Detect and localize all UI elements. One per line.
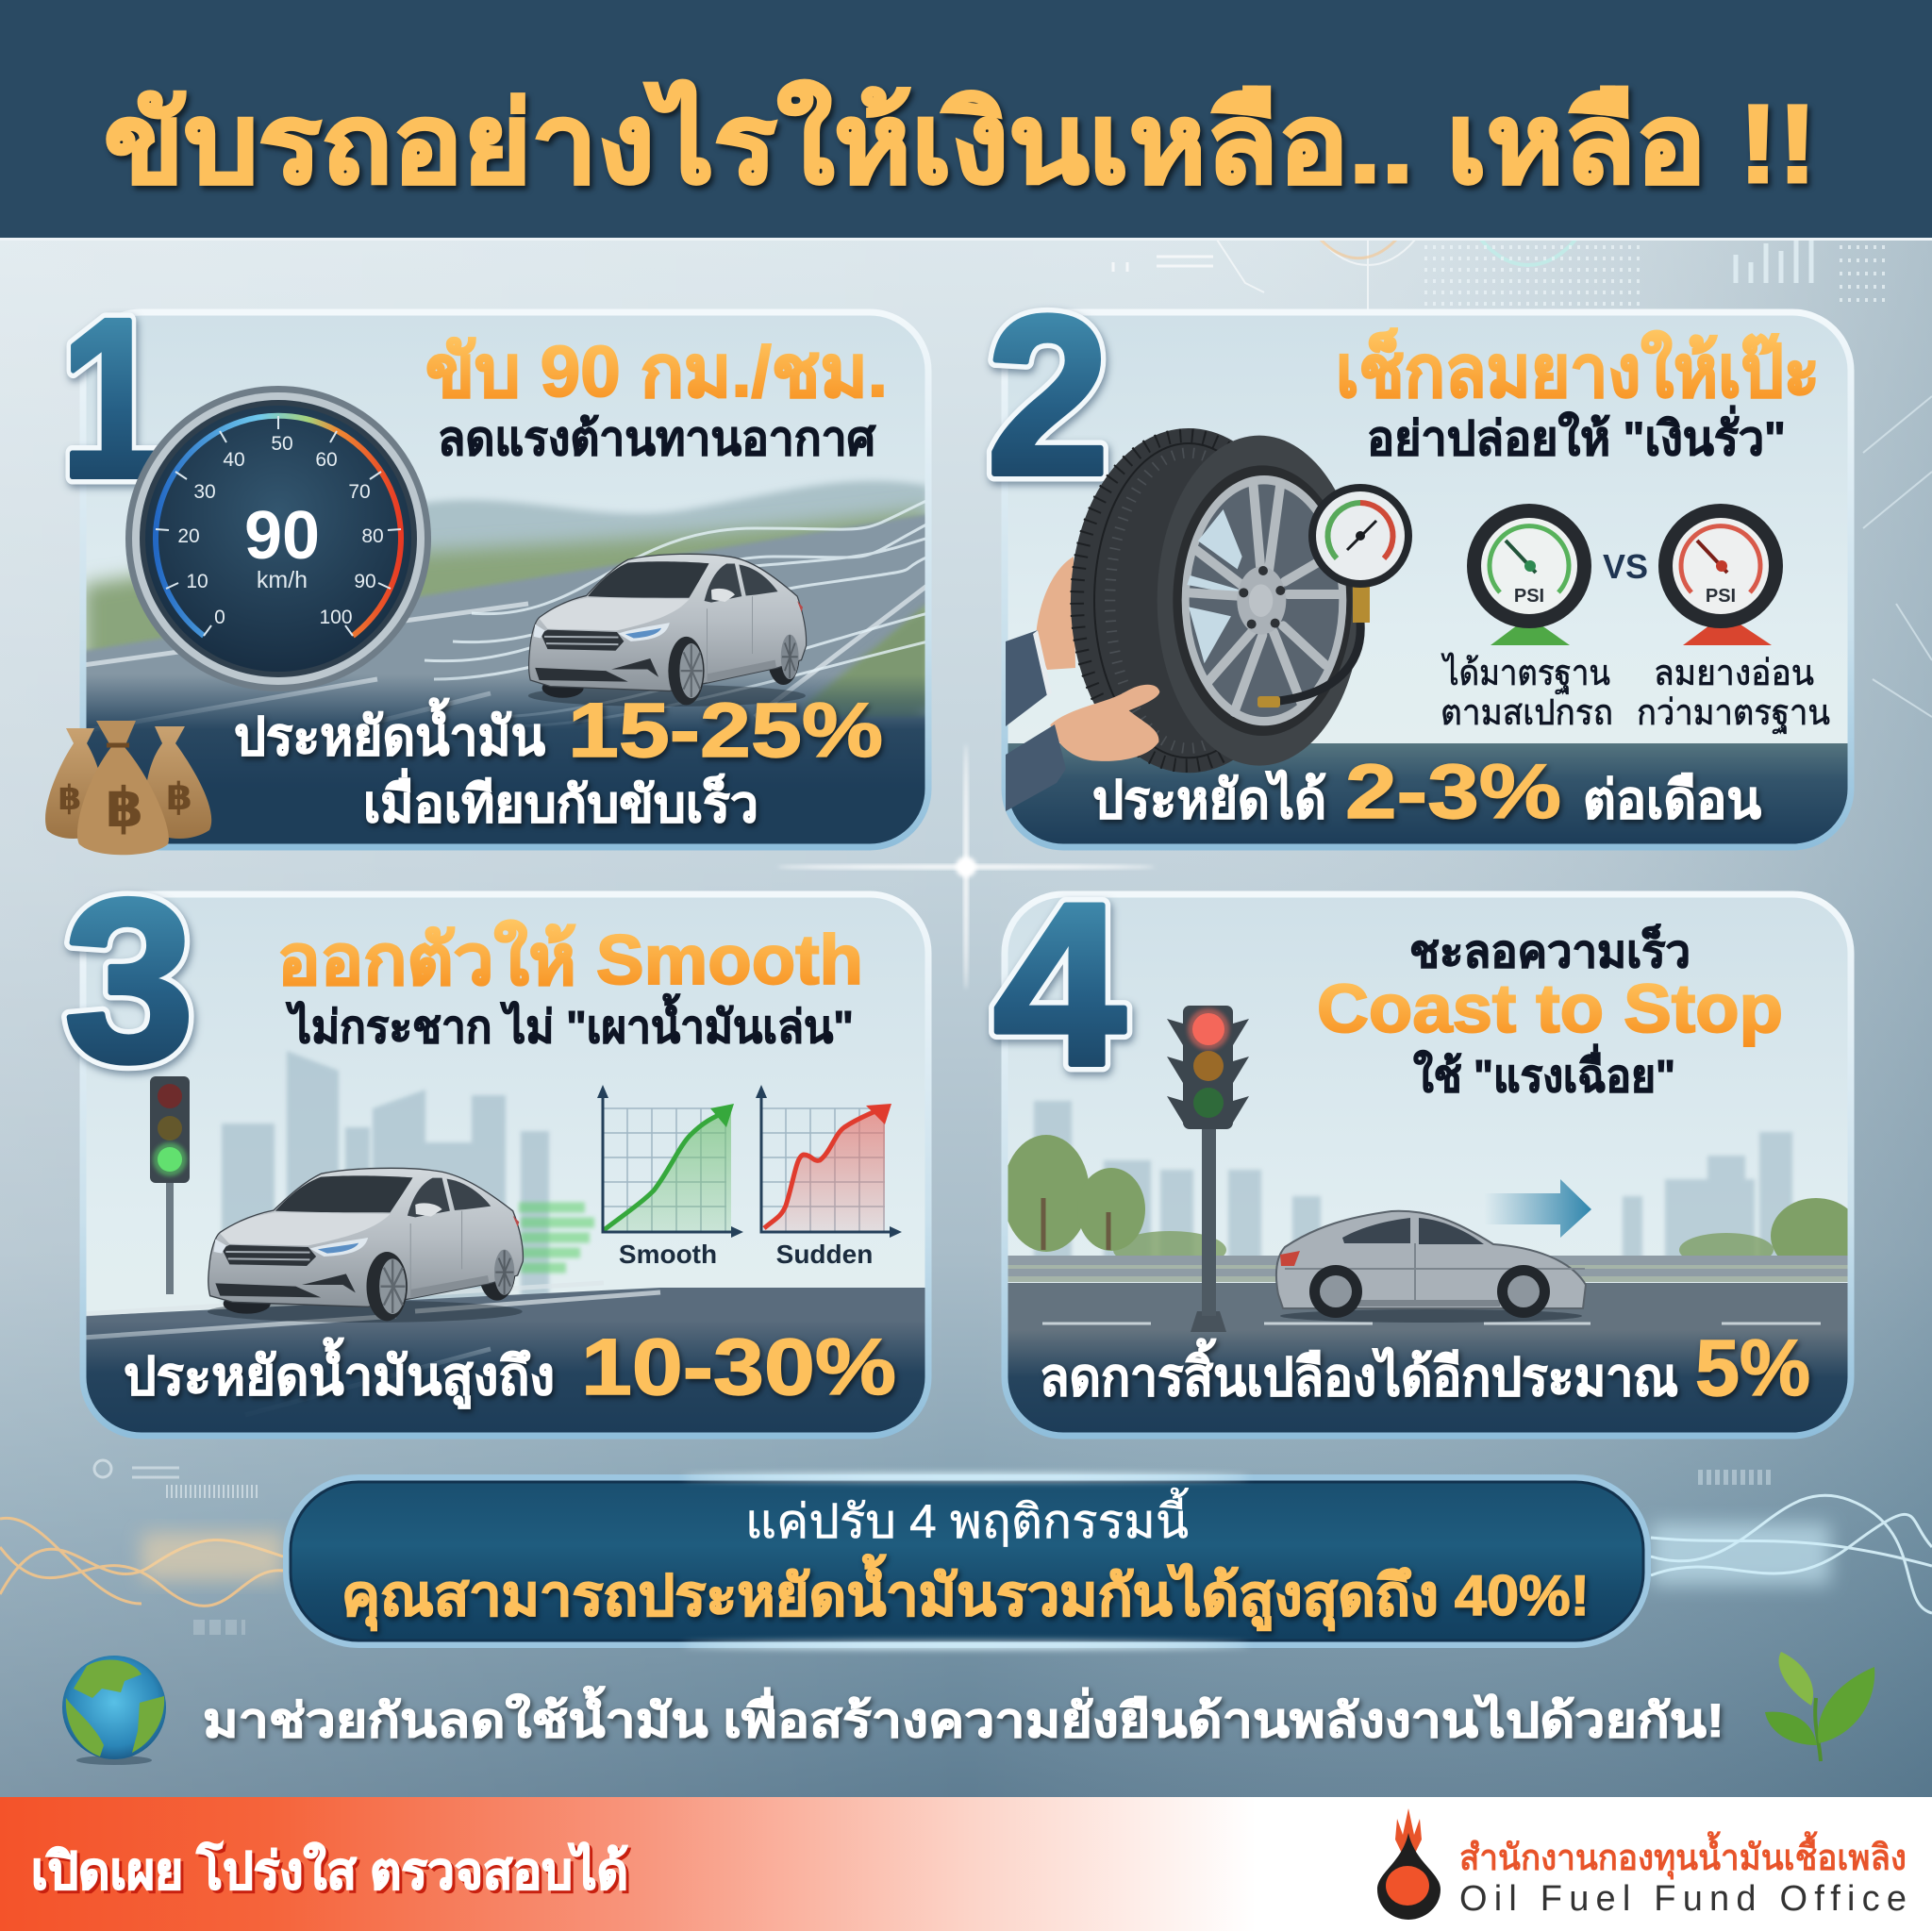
panel 1 subheading: ลดแรงต้านทานอากาศ <box>438 412 876 465</box>
panel 2 border <box>1005 312 1851 847</box>
panel 3 scene <box>83 894 928 1436</box>
logo: oil fuel fund drop <box>1377 1808 1441 1920</box>
speedometer: 60 <box>315 449 338 471</box>
speedometer: 70 <box>348 481 371 503</box>
speedometer: 50 <box>271 433 293 455</box>
closing line: มาช่วยกันลดใช้น้ำมัน เพื่อสร้างความยั่งยืนด้านพลังงานไปด้วยกัน! <box>203 1686 1724 1747</box>
icon: money bags <box>45 721 211 855</box>
icon: car <box>528 554 807 707</box>
panel 1: drive at 90 <box>45 272 928 855</box>
logo text thai: สำนักงานกองทุนน้ำมันเชื้อเพลิง <box>1459 1831 1907 1880</box>
speedometer: 80 <box>361 525 384 547</box>
speedometer: 100 <box>319 607 353 628</box>
panel 4 saving label: ลดการสิ้นเปลืองได้อีกประมาณ <box>1040 1339 1678 1407</box>
panel 4 scene <box>1003 894 1861 1436</box>
panel 3 heading: ออกตัวให้ Smooth <box>277 919 863 999</box>
icon: plant <box>1765 1652 1874 1761</box>
number 3: 3 <box>64 851 194 1109</box>
icon: low pressure: PSI <box>1706 586 1736 607</box>
icon: traffic light green <box>150 1076 190 1294</box>
hose <box>1279 623 1360 701</box>
sudden chart <box>756 1085 902 1238</box>
icon: side view car <box>1276 1211 1586 1323</box>
panel 1 note: เมื่อเทียบกับขับเร็ว <box>363 768 758 833</box>
lower sleeve <box>1006 724 1066 811</box>
panel 3 subheading: ไม่กระชาก ไม่ "เผาน้ำมันเล่น" <box>285 993 854 1053</box>
footer band <box>0 1797 1932 1931</box>
speedometer: 20 <box>177 525 200 547</box>
icon: correct pressure: PSI <box>1514 586 1544 607</box>
panel 3: smooth acceleration <box>64 851 928 1436</box>
smooth chart <box>597 1085 743 1238</box>
red gauge label <box>1637 654 1830 734</box>
number 1: 1 <box>60 272 164 524</box>
panel 1 scene <box>83 312 928 847</box>
panel 2 saving value: 2-3% <box>1345 749 1561 835</box>
panel 3 saving value: 10-30% <box>581 1323 896 1411</box>
header divider <box>0 238 1932 241</box>
green gauge label <box>1441 653 1613 733</box>
icon: car <box>208 1168 523 1323</box>
number 2: 2 <box>987 269 1109 522</box>
header banner <box>0 0 1932 238</box>
red gauge label: ลมยางอ่อน <box>1654 654 1814 693</box>
speedometer: 90 <box>354 571 376 592</box>
title: ขับรถอย่างไรให้เงินเหลือ.. เหลือ !! <box>104 80 1817 207</box>
icon: traffic light red <box>1167 1006 1249 1332</box>
icon: tire pressure gauge <box>1308 484 1412 623</box>
upper arm and hand <box>1006 557 1075 726</box>
red gauge label: กว่ามาตรฐาน <box>1637 693 1830 734</box>
green gauge label: ตามสเปกรถ <box>1441 693 1613 733</box>
panel 4: coast to stop <box>993 855 1861 1436</box>
panel 4 border <box>1005 894 1851 1436</box>
panel 2 scene <box>1005 312 1851 847</box>
icon: money bags: ฿ <box>106 775 143 840</box>
speedometer: 30 <box>193 481 216 503</box>
icon: tire with rim <box>1050 428 1361 773</box>
icon: low pressure <box>1658 504 1783 645</box>
speedometer: km/h <box>257 567 308 593</box>
speedometer <box>125 386 431 691</box>
panel 4 top line: ชะลอความเร็ว <box>1409 924 1690 977</box>
panel 1 saving label: ประหยัดน้ำมัน <box>234 698 545 766</box>
green gauge label: ได้มาตรฐาน <box>1441 653 1610 694</box>
number 4: 4 <box>993 855 1125 1113</box>
icon: globe <box>62 1656 166 1765</box>
pill second line: คุณสามารถประหยัดน้ำมันรวมกันได้สูงสุดถึง 40%! <box>341 1554 1590 1631</box>
summary pill <box>283 1473 1651 1649</box>
smooth chart label: Smooth <box>619 1240 717 1269</box>
sudden chart label: Sudden <box>776 1240 873 1269</box>
panel 1 saving value: 15-25% <box>568 688 883 774</box>
panel 3 saving label: ประหยัดน้ำมันสูงถึง <box>124 1338 555 1409</box>
logo text english: Oil Fuel Fund Office <box>1459 1879 1907 1919</box>
panel 4 saving value: 5% <box>1695 1323 1810 1412</box>
panel 1 heading: ขับ 90 กม./ชม. <box>425 332 888 412</box>
number 4: 4 <box>993 855 1125 1113</box>
vs label: VS <box>1603 547 1648 586</box>
icon: money bags: ฿ <box>166 775 192 819</box>
speedometer: 90 <box>244 498 320 574</box>
number 3: 3 <box>64 851 194 1109</box>
valve <box>1257 696 1280 707</box>
panel 2 subheading: อย่าปล่อยให้ "เงินรั่ว" <box>1367 406 1786 465</box>
icon: correct pressure <box>1467 504 1591 645</box>
panel 4 heading: Coast to Stop <box>1317 972 1783 1047</box>
panel 2 heading: เช็กลมยางให้เป๊ะ <box>1336 328 1820 412</box>
panel 2 saving label: ประหยัดได้ <box>1092 769 1326 829</box>
speedometer: 40 <box>223 449 245 471</box>
panel 2 saving unit: ต่อเดือน <box>1583 770 1761 829</box>
speedometer: 10 <box>186 571 208 592</box>
panel 1 border <box>83 312 928 847</box>
number 1: 1 <box>60 272 164 524</box>
panel 3 border <box>83 894 928 1436</box>
icon: money bags: ฿ <box>58 779 82 818</box>
footer slogan: เปิดเผย โปร่งใส ตรวจสอบได้ <box>31 1841 628 1900</box>
pill first line: แค่ปรับ 4 พฤติกรรมนี้ <box>745 1488 1189 1548</box>
number 2: 2 <box>987 269 1109 522</box>
panel 4 bottom line: ใช้ "แรงเฉื่อย" <box>1413 1043 1675 1102</box>
speedometer: 0 <box>214 607 225 628</box>
panel 2: tire pressure <box>987 269 1851 847</box>
icon: motion arrow <box>1484 1179 1591 1238</box>
